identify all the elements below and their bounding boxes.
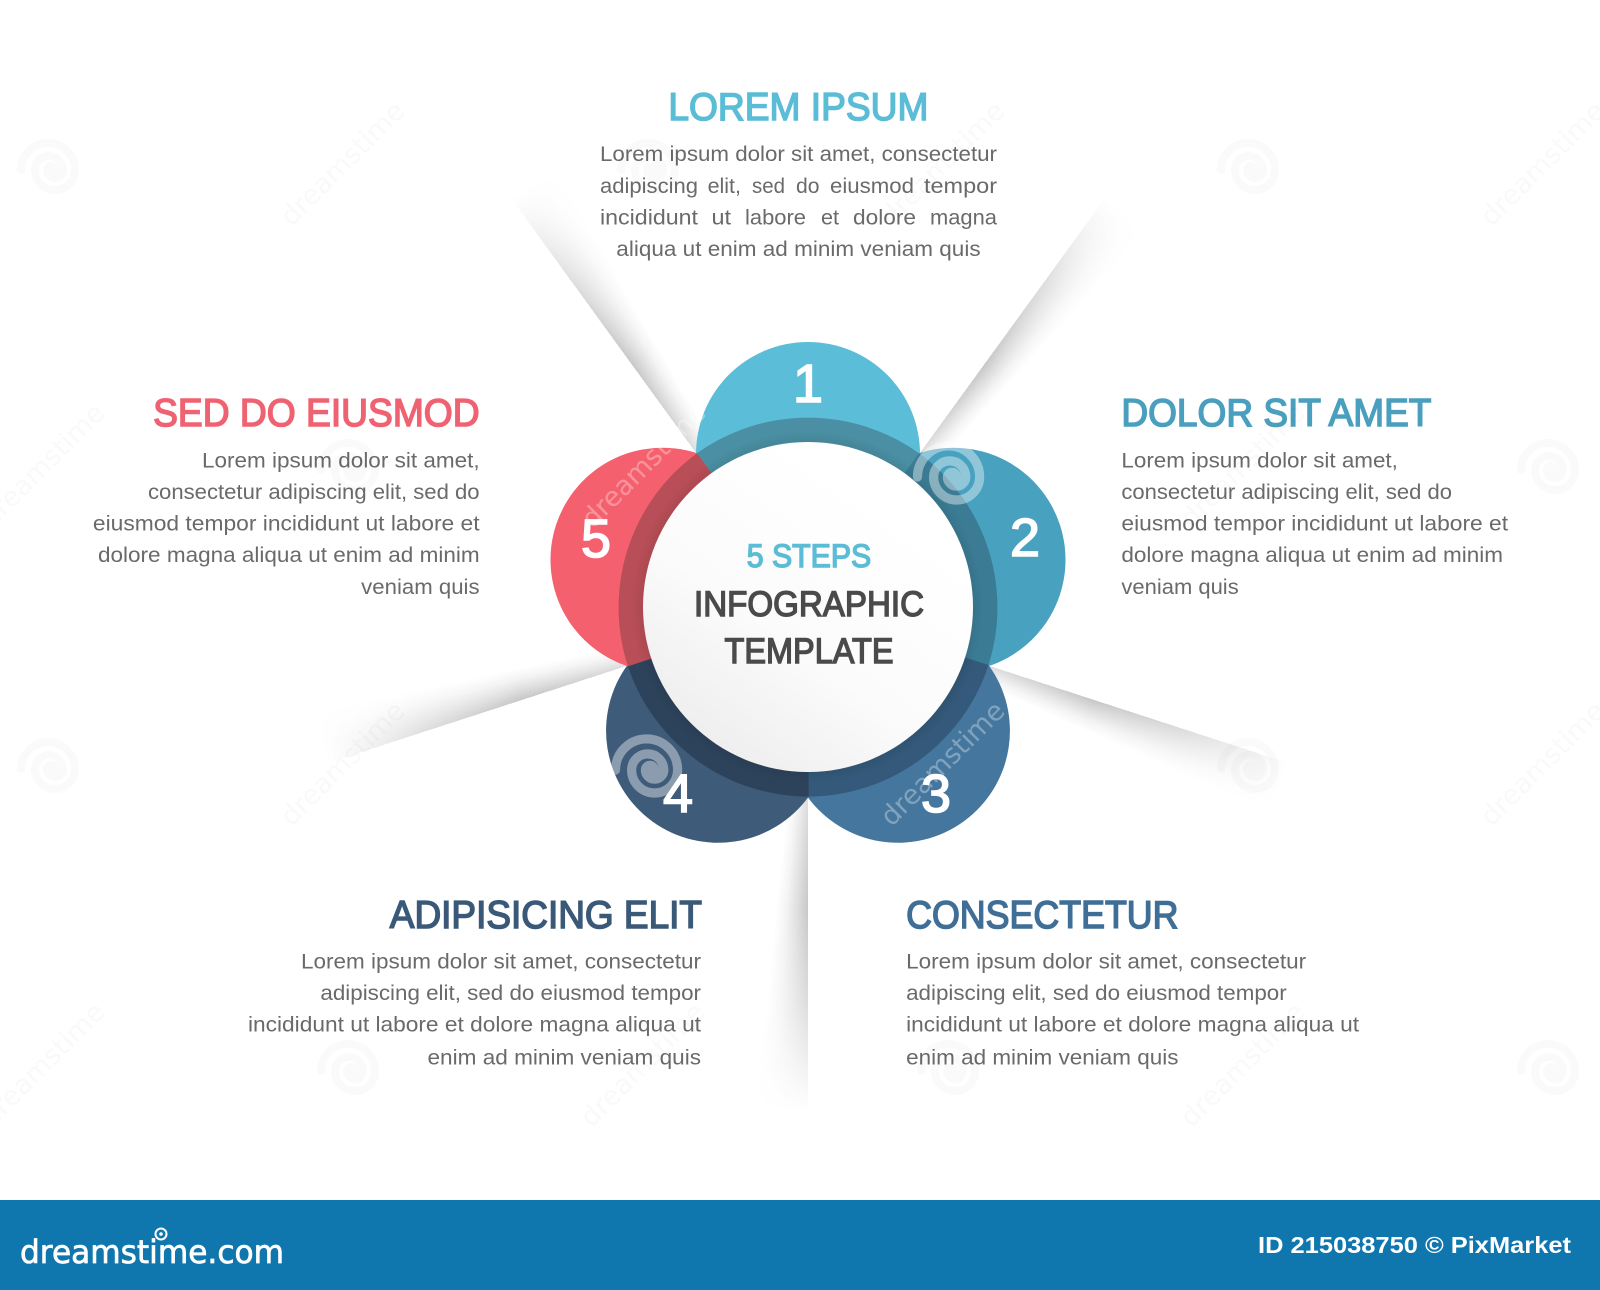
footer credit: ID 215038750 © PixMarket	[1258, 1232, 1571, 1258]
shadow: bottom fold	[780, 798, 808, 1085]
center label	[694, 538, 924, 671]
petal 3	[717, 541, 1054, 887]
watermark: text on petals: dreamstime	[875, 696, 1011, 832]
body text: dolore magna aliqua ut enim ad minim	[1121, 544, 1503, 567]
footer logo: dreamstime.com	[20, 1233, 284, 1271]
watermark: text on petals	[576, 398, 1011, 832]
center label: 5 steps: 5 STEPS	[747, 538, 871, 574]
heading: sed do eiusmod: SED DO EIUSMOD	[153, 392, 480, 435]
number 2: 2	[1010, 508, 1040, 568]
number 5: 5	[581, 509, 611, 569]
step 2 text block	[1121, 392, 1508, 599]
footer bar	[0, 1200, 1600, 1290]
watermark: text on white: dreamstime	[275, 696, 411, 832]
body text: dolore magna aliqua ut enim ad minim	[98, 544, 480, 567]
body text: ut	[712, 206, 731, 230]
body text: do	[796, 175, 820, 198]
heading: dolor sit amet: DOLOR SIT AMET	[1121, 392, 1431, 435]
step 4 text block	[248, 894, 702, 1069]
body text: aliqua ut enim ad minim veniam quis	[616, 238, 981, 261]
watermark: text on petals: dreamstime	[576, 398, 712, 534]
body text: tempor	[924, 175, 997, 198]
heading: lorem ipsum: LOREM IPSUM	[668, 86, 928, 129]
body text	[1121, 449, 1508, 599]
watermark: spiral on petal 2	[918, 446, 980, 500]
petal 4	[562, 541, 899, 887]
center circle	[643, 442, 973, 772]
petal 1	[696, 342, 920, 607]
shadow: lower-left fold	[353, 657, 626, 755]
step 5 text block	[93, 392, 480, 599]
watermark: text on white: dreamstime	[1175, 398, 1311, 534]
body text: eiusmod	[830, 175, 914, 198]
shadow: lower-right fold	[990, 666, 1262, 766]
body text: elit,	[708, 175, 741, 198]
body text: labore	[745, 206, 806, 230]
body text: consectetur adipiscing elit, sed do	[148, 481, 480, 504]
body text: incididunt ut labore et dolore magna aliqua ut	[906, 1014, 1359, 1037]
petal 2	[773, 419, 1095, 714]
heading: consectetur: CONSECTETUR	[906, 894, 1178, 937]
body text: incididunt	[600, 206, 698, 230]
heading: adipisicing elit: ADIPISICING ELIT	[390, 894, 702, 937]
body text	[248, 950, 701, 1069]
watermark: text on white: dreamstime	[275, 96, 411, 232]
body text: Lorem ipsum dolor sit amet,	[1121, 449, 1398, 472]
body text: sed	[752, 175, 785, 198]
petal 5	[521, 419, 843, 714]
body text: veniam quis	[361, 576, 480, 599]
number 3: 3	[921, 764, 951, 824]
body text: enim ad minim veniam quis	[906, 1046, 1178, 1069]
watermark: spiral on petal 4	[616, 739, 678, 793]
watermark: text on white: dreamstime	[575, 997, 711, 1133]
body text	[906, 950, 1359, 1069]
shadow: upper-left fold	[527, 220, 698, 452]
step 3 text block	[906, 894, 1359, 1069]
number 1: 1	[793, 354, 823, 414]
flower diagram	[521, 342, 1095, 887]
body text: et	[821, 206, 839, 230]
body text: consectetur adipiscing elit, sed do	[1121, 481, 1452, 504]
step 1 text block	[600, 86, 997, 261]
shadow: upper-right fold	[920, 220, 1094, 453]
body text: eiusmod tempor incididunt ut labore et	[93, 513, 480, 536]
body text: adipiscing elit, sed do eiusmod tempor	[320, 982, 701, 1005]
body text: veniam quis	[1121, 576, 1239, 599]
center label: infographic: INFOGRAPHIC	[694, 585, 924, 624]
body text: adipiscing	[600, 175, 698, 198]
body text	[93, 449, 480, 599]
watermark: spirals	[21, 143, 1575, 1091]
body text: magna	[930, 206, 997, 230]
body text	[600, 143, 997, 261]
watermark: text on white: dreamstime	[1175, 997, 1311, 1133]
watermark: text on white: dreamstime	[875, 96, 1011, 232]
body text: Lorem ipsum dolor sit amet,	[202, 449, 480, 472]
body text: Lorem ipsum dolor sit amet, consectetur	[600, 143, 997, 166]
body text: Lorem ipsum dolor sit amet, consectetur	[906, 950, 1306, 973]
body text: eiusmod tempor incididunt ut labore et	[1121, 513, 1508, 536]
body text: Lorem ipsum dolor sit amet, consectetur	[301, 950, 701, 973]
body text: dolore	[853, 206, 916, 230]
center label: template: TEMPLATE	[724, 632, 894, 671]
body text: incididunt ut labore et dolore magna aliqua ut	[248, 1014, 701, 1037]
body text: enim ad minim veniam quis	[428, 1046, 701, 1069]
body text: adipiscing elit, sed do eiusmod tempor	[906, 982, 1287, 1005]
number 4: 4	[663, 764, 693, 824]
